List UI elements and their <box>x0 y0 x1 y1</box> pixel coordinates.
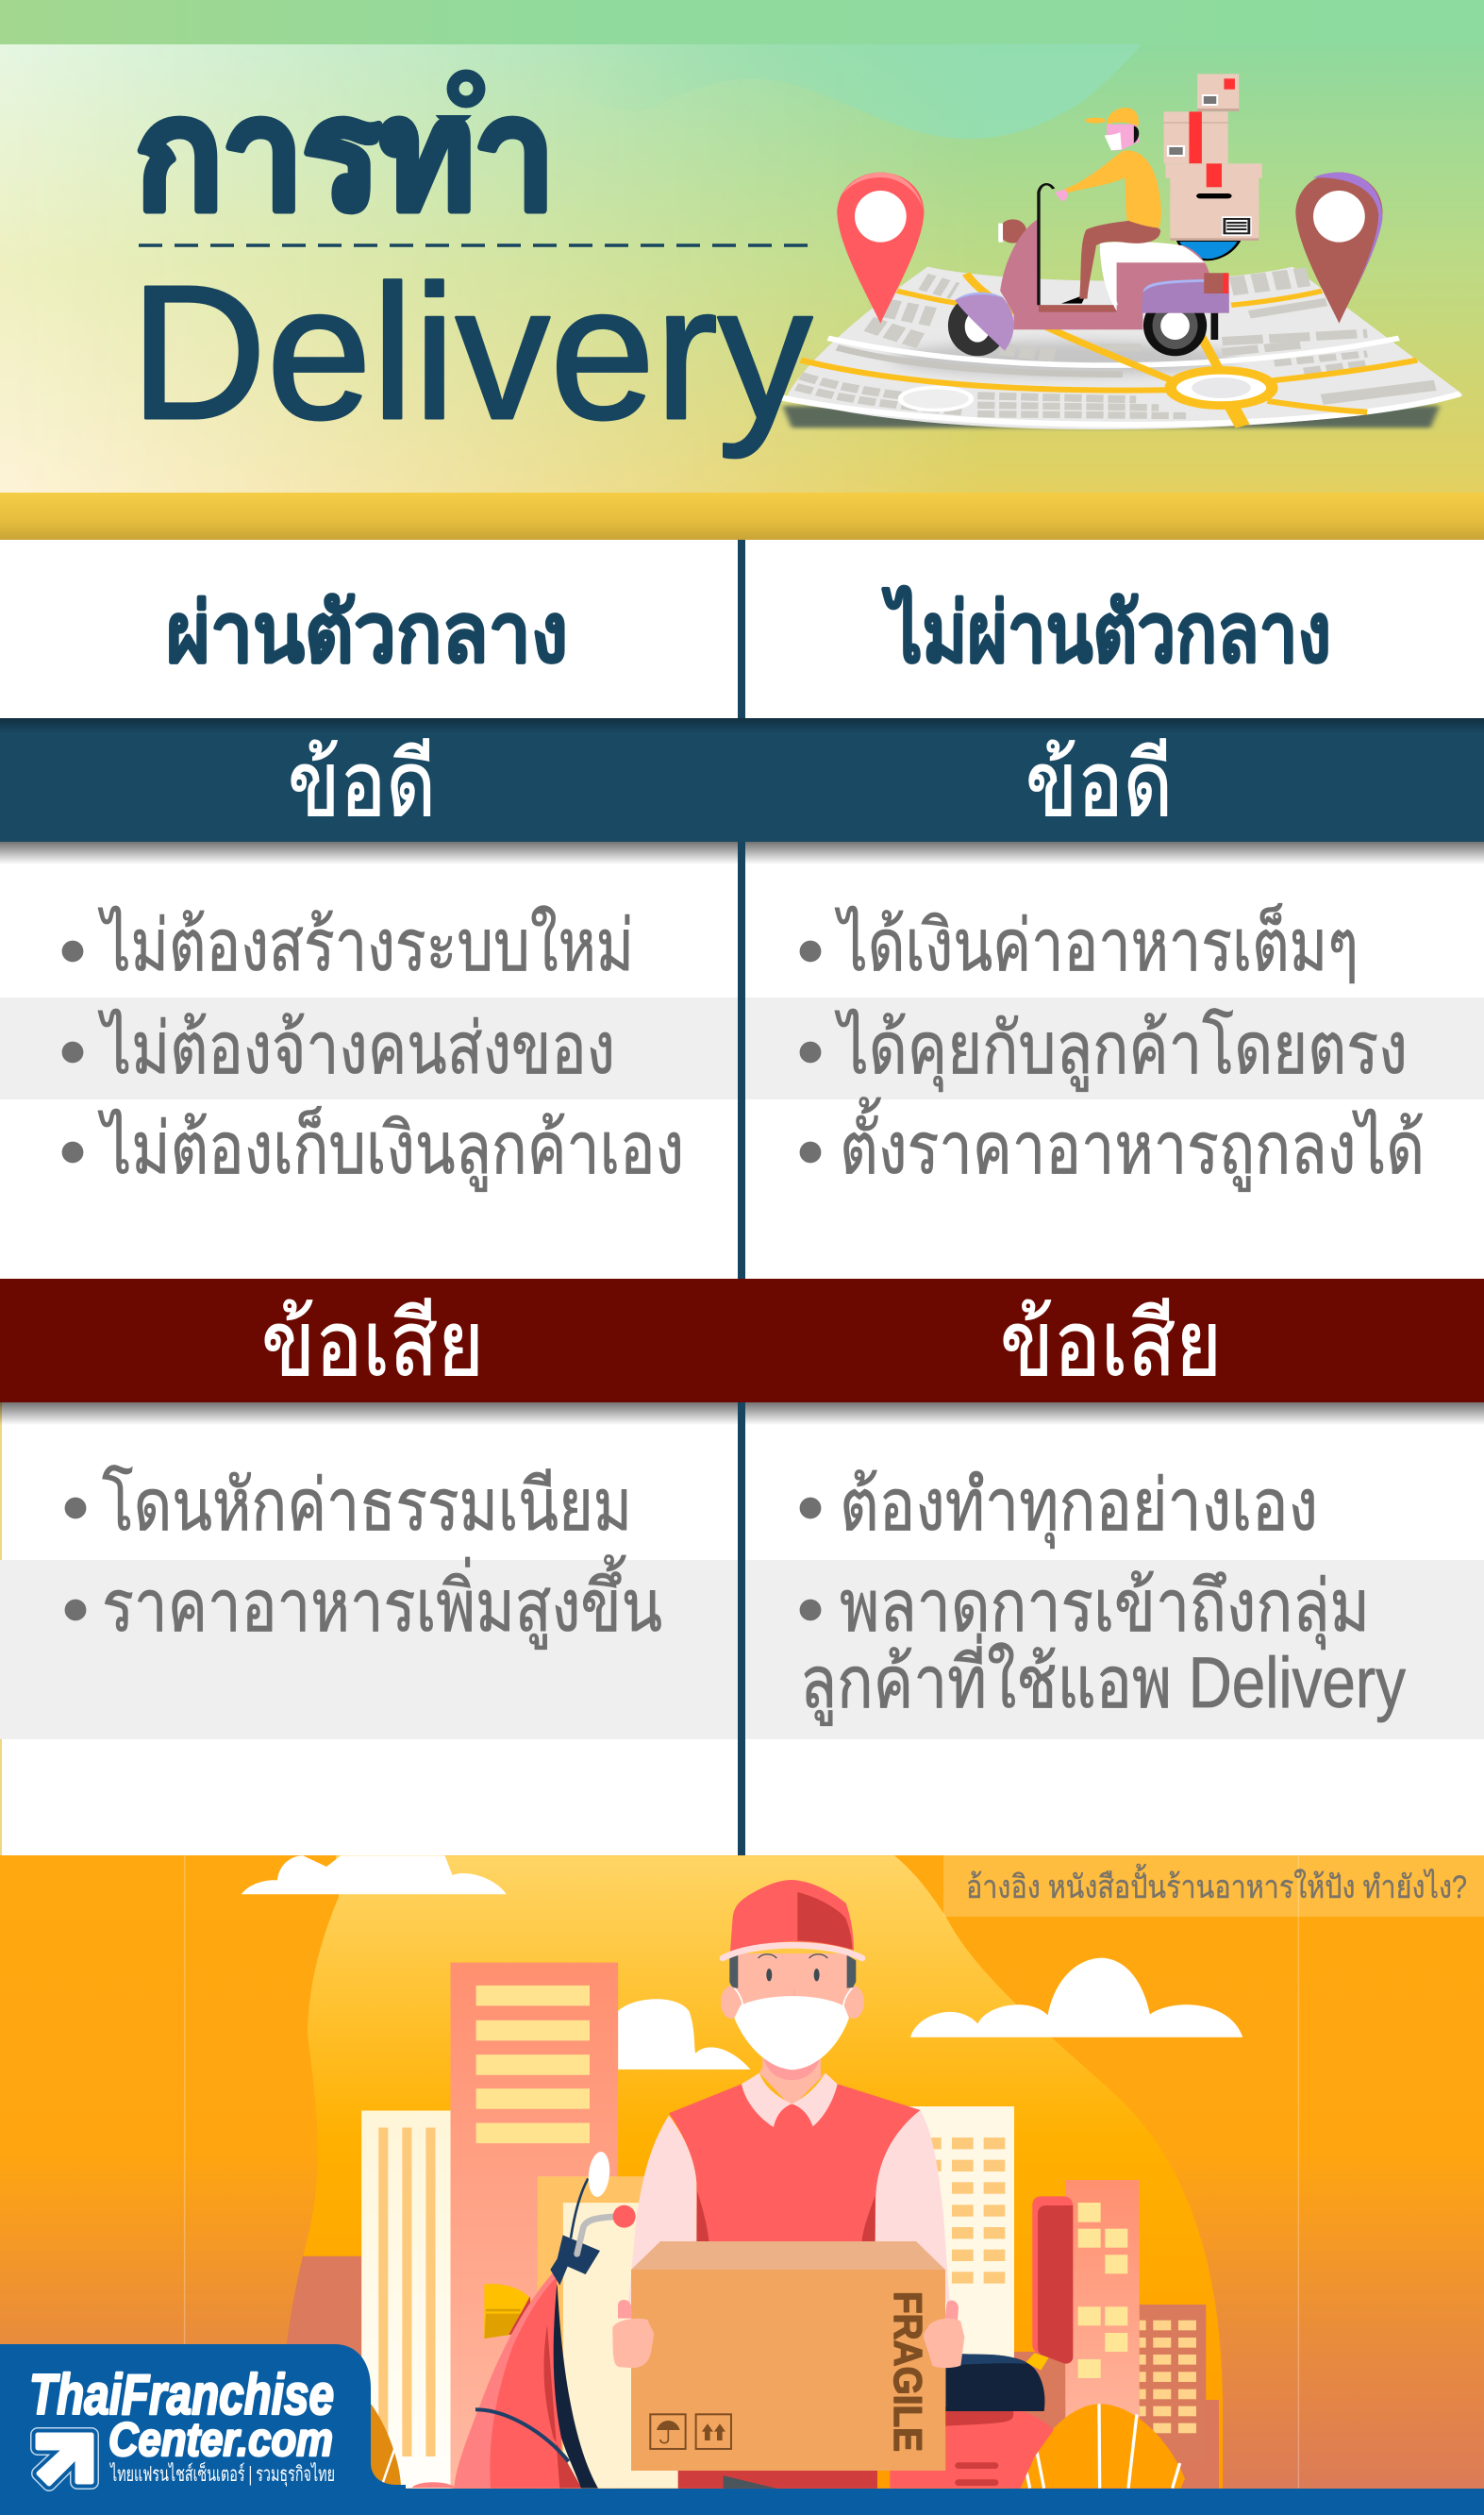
disadvantages list: no intermediary <box>800 1466 1406 1726</box>
advantages list: via intermediary: ไม่ต้องสร้างระบบใหม่ <box>97 905 634 986</box>
parcel box <box>631 2241 945 2471</box>
bottom blue strip <box>0 2489 1484 2515</box>
logo: ThaiFranchise Center.com: ไทยแฟรนไชส์เซ็นเตอร์ | รวมธุรกิจไทย <box>109 2460 335 2487</box>
advantages list: no intermediary <box>800 903 1425 1192</box>
header banner <box>0 0 1484 540</box>
scooter <box>948 184 1240 356</box>
delivery rider <box>1055 108 1161 304</box>
icon: logo arrow <box>38 2435 92 2484</box>
logo: ThaiFranchise Center.com: Center.com <box>108 2413 333 2466</box>
stacked parcels <box>1164 74 1262 241</box>
illustration: scooter delivery rider on map <box>783 74 1463 429</box>
brown location pin <box>1295 173 1383 324</box>
comparison table <box>0 540 1484 1855</box>
advantages list: no intermediary: ได้เงินค่าอาหารเต็มๆ <box>834 903 1359 986</box>
disadvantages list: via intermediary <box>65 1465 662 1650</box>
disadvantages list: via intermediary: ราคาอาหารเพิ่มสูงขึ้น <box>102 1554 662 1650</box>
footer illustration <box>0 1855 1484 2515</box>
dashed divider under title <box>139 243 811 247</box>
advantages list: via intermediary <box>62 905 684 1192</box>
disadvantages list: no intermediary: พลาดการเข้าถึงกลุ่ม <box>840 1567 1370 1650</box>
title: การทำ: การทำ <box>136 70 555 241</box>
disadvantages list: no intermediary: ต้องทำทุกอย่างเอง <box>840 1466 1318 1549</box>
clouds <box>242 1855 1242 2070</box>
disadvantages list: via intermediary: โดนหักค่าธรรมเนียม <box>102 1465 632 1546</box>
advantages list: via intermediary: ไม่ต้องเก็บเงินลูกค้าเอง <box>97 1106 684 1192</box>
map <box>783 267 1463 429</box>
column heading: via intermediary: ผ่านตัวกลาง <box>166 586 568 679</box>
scooter <box>412 2151 1054 2489</box>
reference caption <box>943 1855 1484 1917</box>
buildings right <box>856 2106 1206 2463</box>
disadvantages band: ข้อเสีย <box>261 1294 484 1395</box>
advantages list: via intermediary: ไม่ต้องจ้างคนส่งของ <box>97 1008 615 1089</box>
delivery man <box>628 1880 950 2489</box>
column heading: no intermediary: ไม่ผ่านตัวกลาง <box>881 586 1331 679</box>
buildings left <box>361 1963 681 2489</box>
disadvantages band <box>0 1279 1484 1425</box>
logo: ThaiFranchise Center.com <box>0 2344 406 2491</box>
red location pin <box>837 173 924 324</box>
hands <box>612 2300 964 2368</box>
column divider <box>0 540 745 1855</box>
fragile label: FRAGILE <box>886 2291 930 2452</box>
advantages band: ข้อดี <box>1025 734 1173 835</box>
logo: ThaiFranchise Center.com: ThaiFranchise <box>29 2363 334 2426</box>
icon: handling symbols <box>650 2414 731 2449</box>
advantages band: ข้อดี <box>288 734 436 835</box>
title: Delivery: Delivery <box>130 245 812 459</box>
disadvantage row background <box>0 1560 1484 1739</box>
advantages band <box>0 718 1484 864</box>
orange city background <box>0 1855 1484 2515</box>
disadvantages band: ข้อเสีย <box>1000 1294 1222 1395</box>
advantage rows background <box>0 998 1484 1099</box>
bushes <box>371 2404 1185 2489</box>
